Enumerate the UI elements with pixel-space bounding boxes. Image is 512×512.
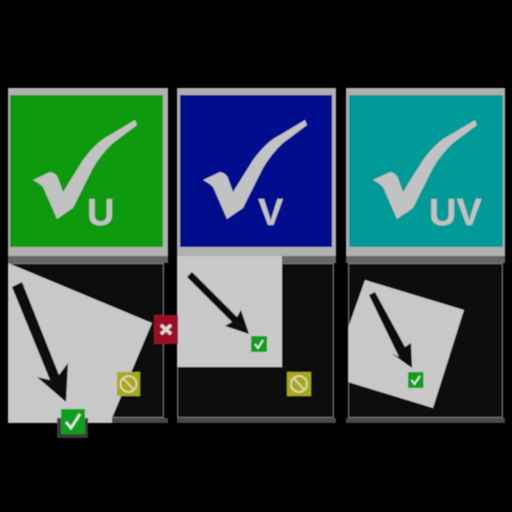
badge: yellow no-symbol right xyxy=(287,372,311,396)
badge: large green check xyxy=(57,409,88,438)
label: U: U xyxy=(87,192,114,234)
badge: small green check middle xyxy=(251,336,267,352)
badge: red cross xyxy=(154,315,178,344)
panel: U check xyxy=(8,88,168,256)
icon: U checkmark xyxy=(33,120,137,219)
icon: arrow xyxy=(369,292,412,368)
shape: skewed image xyxy=(8,263,152,423)
panel: U example xyxy=(8,250,168,423)
icon: arrow xyxy=(187,272,249,334)
shape: scaled image xyxy=(177,256,282,367)
icon: UV checkmark xyxy=(373,120,477,219)
badge: yellow no-symbol left xyxy=(117,372,140,396)
panel: V check xyxy=(177,88,336,256)
label: UV: UV xyxy=(429,192,482,234)
panel: V example xyxy=(177,250,336,423)
label: V: V xyxy=(258,192,284,234)
badge: small green check right xyxy=(408,372,424,388)
icon: arrow xyxy=(12,282,68,402)
icon: V checkmark xyxy=(203,120,307,219)
shape: rotated image xyxy=(348,280,464,408)
panel: UV example xyxy=(346,250,505,423)
panel: UV check xyxy=(346,88,505,256)
